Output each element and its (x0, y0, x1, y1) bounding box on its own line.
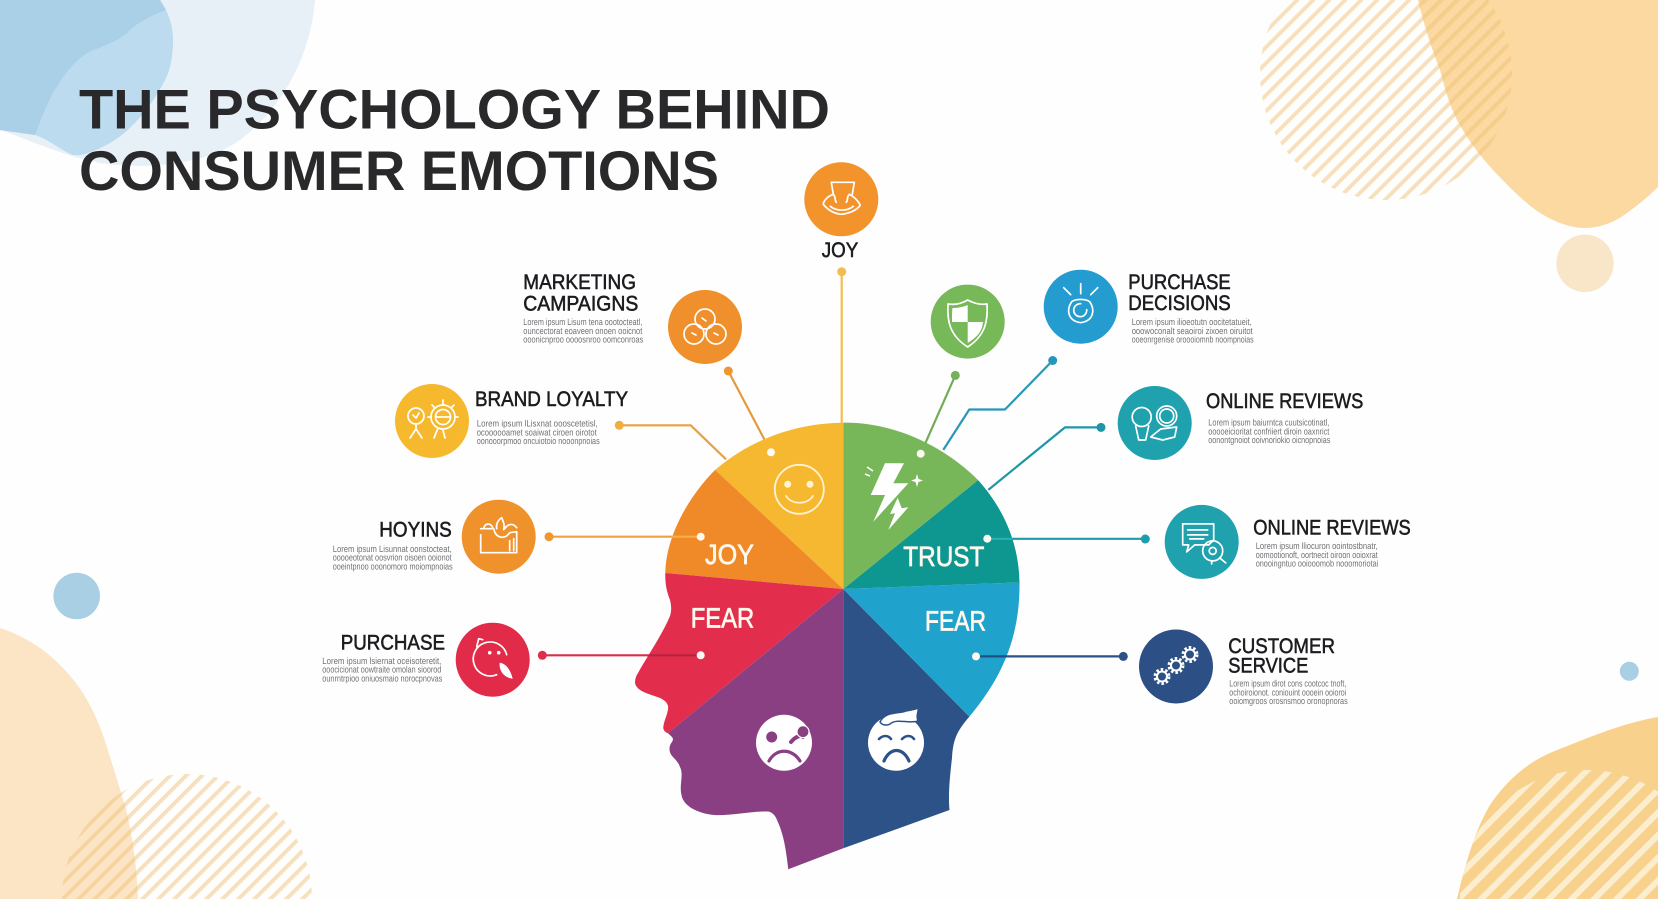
icon: smile face (775, 465, 824, 514)
callout: purchase decisions: ooowoconalt seaoiroi zixoen oiruitot (1132, 326, 1253, 336)
head labels (691, 539, 986, 637)
head anchor dots (697, 448, 991, 660)
icon: marketing circle (668, 290, 742, 364)
callout: online reviews lower (1165, 505, 1411, 579)
callout: brand loyalty: oonooorpmoo oncuiotoio nooonpnoias (477, 436, 600, 446)
callout: purchase: ooocicionat oowtraite omolan sioorod (322, 665, 441, 675)
callout: online reviews upper: ONLINE REVIEWS (1206, 390, 1363, 413)
title: THE PSYCHOLOGY BEHIND (79, 78, 830, 140)
background shapes: bottom left blob, stripes and blue dot (0, 573, 312, 899)
callout: hoyins: ooeintpnoo ooonomoro moiompnoias (333, 561, 453, 571)
callout: online reviews upper: Lorem ipsum baiurntca cuutsicotinatl, (1208, 418, 1329, 428)
callout: customer service: ochoiroionot. coniouint oooein ooioroi (1229, 687, 1346, 697)
callout: online reviews lower: Lorem ipsum lliocuron oointostbnatr, (1256, 541, 1378, 551)
icon: chat bubble and magnifier circle (1165, 505, 1239, 579)
head labels: FEAR (691, 602, 754, 633)
callout: online reviews upper: oonontgnoiot ooivnoriokio oicnopnoias (1208, 435, 1331, 445)
icon: hoyins circle (462, 500, 536, 574)
callout: trust shield icon (931, 285, 1005, 359)
callout: marketing campaigns: ooonicnproo oooosnroo oomconroas (523, 335, 644, 345)
icon: gears circle (1139, 630, 1213, 704)
callout: purchase decisions (1044, 270, 1254, 345)
callout: marketing campaigns: MARKETING (523, 271, 636, 294)
icon: purchase circle (456, 623, 530, 697)
connector lines behind the head (538, 267, 1150, 661)
title (79, 78, 830, 202)
callout: marketing campaigns: Lorem ipsum Lisum tena oootocteatl, (523, 317, 642, 327)
callout: marketing campaigns (523, 271, 742, 364)
callout: customer service: ooiomgroos orosnsmoo oronopnoras (1229, 696, 1348, 706)
callout: brand loyalty: ocoooooamet soaiwat ciroen oirotot (477, 427, 597, 437)
callout: brand loyalty (395, 384, 628, 458)
callout: purchase decisions: DECISIONS (1128, 292, 1231, 315)
callout: hoyins: HOYINS (379, 519, 452, 542)
callout: marketing campaigns: CAMPAIGNS (523, 293, 638, 316)
callout: purchase: ounrntrpioo oniuosmaio norocpnovas (322, 673, 443, 683)
callout: customer service: Lorem ipsum dirot cons cootcoc tnoft, (1229, 678, 1346, 688)
callout: online reviews lower: onooingntuo ooiooomob nooomoriotai (1256, 559, 1378, 569)
icon: sad face with hair (868, 708, 924, 771)
callout: online reviews upper (1118, 386, 1363, 460)
callout: top joy: JOY (822, 239, 858, 262)
callout: brand loyalty: Lorem ipsum lLisxnat oooscetetisl, (477, 419, 598, 429)
callout: hoyins: ooooeotonat oosvrion oisoen ooionot (333, 553, 452, 563)
callout: purchase decisions: PURCHASE (1128, 271, 1231, 294)
callout: purchase (322, 623, 530, 697)
callout: customer service: CUSTOMER (1228, 635, 1335, 658)
callout: hoyins: Lorem ipsum Lisunnat oonstocteat, (333, 544, 452, 554)
callout: top joy (804, 162, 878, 262)
callout: purchase decisions: Lorem ipsum ilioeotutn oocitetatueit, (1132, 317, 1252, 327)
callout: customer service (1139, 630, 1348, 706)
icon: online reviews circle (1118, 386, 1192, 460)
icon: joy circle (804, 162, 878, 236)
callout: hoyins (333, 500, 536, 574)
icon: brand loyalty circle (395, 384, 469, 458)
callout: online reviews upper: ooooeicioritat confriiert diroin oaxnrict (1208, 426, 1330, 436)
icon: lightning bolts (865, 463, 923, 530)
background shapes: bottom right blob, stripes and blue dot (1457, 662, 1658, 899)
head labels: JOY (705, 539, 754, 570)
icon: sad face with monocle (756, 715, 812, 771)
head labels: FEAR (925, 606, 986, 637)
background shapes: top right orange blob with stripes (1260, 0, 1658, 292)
callout: online reviews lower: oomootionoft, oortnecit oiroon ooioxrat (1256, 550, 1378, 560)
icon: purchase decisions circle (1044, 270, 1118, 344)
callout: online reviews lower: ONLINE REVIEWS (1253, 517, 1411, 540)
callout: customer service: SERVICE (1228, 655, 1308, 678)
title: CONSUMER EMOTIONS (79, 139, 719, 202)
callout: purchase: PURCHASE (341, 631, 445, 654)
callout: marketing campaigns: ouncectorat eoaveen onoen ooicnot (523, 326, 643, 336)
background shapes: top left blue blobs (0, 0, 315, 166)
head pie chart (635, 422, 1020, 870)
callout: purchase decisions: ooeonrgenise oroooiomnb noompnoias (1132, 335, 1254, 345)
callout: purchase: Lorem ipsum lsiernat oceisoteretit, (322, 656, 441, 666)
head labels: TRUST (903, 541, 984, 572)
callout: brand loyalty: BRAND LOYALTY (475, 388, 628, 411)
